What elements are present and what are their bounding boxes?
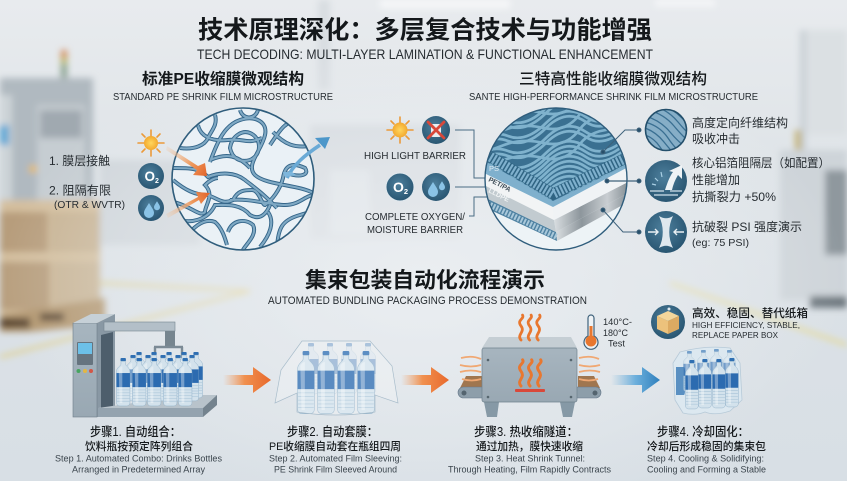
caption: step 2: PE收缩膜自动套在瓶组四周: [269, 439, 401, 453]
icon: thermometer: [584, 315, 598, 349]
subheading: process: AUTOMATED BUNDLING PACKAGING PROCESS DEMONSTRATION: [268, 295, 587, 307]
icon: oxygen: [138, 163, 164, 189]
caption: step 1: 饮料瓶按预定阵列组合: [85, 439, 193, 453]
caption: step 3: 步骤3. 热收缩隧道：: [474, 424, 578, 439]
caption: step 4: [647, 424, 766, 474]
caption: step 2: [269, 424, 402, 474]
chart: tangled polymer circle: [172, 108, 315, 250]
icon: cardboard box: [651, 305, 685, 339]
icon: oxygen: O: [144, 169, 155, 184]
layer labels: PS: [489, 164, 499, 173]
caption: step 4: Cooling and Forming a Stable: [647, 464, 766, 474]
layer labels: LLDPE: [487, 188, 511, 204]
heading: standard PE: 标准PE收缩膜微观结构: [142, 69, 304, 88]
caption: step 3: 通过加热，膜快速收缩: [476, 439, 583, 453]
text: burst PSI: [692, 219, 802, 249]
text: temperature: Test: [608, 338, 625, 350]
subtitle: TECH DECODING: MULTI-LAYER LAMINATION & FUNCTIONAL ENHANCEMENT: [197, 46, 653, 62]
text: aluminium foil barrier: 性能增加: [692, 173, 740, 187]
caption: step 2: PE Shrink Film Sleeved Around: [274, 464, 397, 474]
text: benefits: REPLACE PAPER BOX: [692, 330, 778, 340]
label: high light barrier: HIGH LIGHT BARRIER: [364, 150, 466, 162]
caption: step 4: Step 4. Cooling & Solidifying:: [647, 454, 764, 464]
label: oxygen and moisture barrier: [365, 211, 465, 236]
text: limits list: (OTR & WVTR): [54, 199, 125, 211]
title: 技术原理深化：多层复合技术与功能增强: [198, 16, 652, 44]
layer labels: PET/PA: [487, 177, 512, 194]
caption: step 4: 冷却后形成稳固的集束包: [647, 439, 766, 453]
caption: step 1: Arranged in Predetermined Array: [72, 464, 205, 474]
text: benefits: [692, 306, 808, 340]
panel: standard PE film: [49, 69, 333, 250]
text: oriented fibers: 高度定向纤维结构: [692, 115, 788, 130]
arrow: step 3 to 4: [611, 367, 660, 393]
caption: step 2: Step 2. Automated Film Sleeving:: [269, 454, 402, 464]
label: oxygen and moisture barrier: MOISTURE BARRIER: [367, 224, 463, 236]
icon: oxygen: [386, 173, 414, 201]
text: oriented fibers: [692, 115, 788, 146]
caption: step 4: 步骤4. 冷却固化：: [657, 424, 749, 439]
text: aluminium foil barrier: 核心铝箔阻隔层（如配置）: [692, 155, 830, 170]
heading: process: 集束包装自动化流程演示: [305, 268, 545, 292]
caption: step 2: 步骤2. 自动套膜：: [287, 424, 378, 439]
caption: step 1: [55, 424, 222, 474]
subheading: standard PE: STANDARD PE SHRINK FILM MICROSTRUCTURE: [113, 92, 333, 103]
icon: oxygen: O: [393, 179, 404, 195]
icon: sun: [138, 130, 164, 156]
caption: step 3: Step 3. Heat Shrink Tunnel:: [475, 454, 585, 464]
text: benefits: HIGH EFFICIENCY, STABLE,: [692, 320, 800, 330]
text: burst PSI: (eg: 75 PSI): [692, 237, 749, 249]
chart: layered film circle: [484, 107, 628, 251]
illustration: step 3 heat shrink tunnel: [458, 315, 601, 417]
label: oxygen and moisture barrier: COMPLETE OXYGEN/: [365, 211, 465, 223]
text: limits list: [49, 153, 125, 211]
illustration: step 2 film sleeving: [275, 341, 398, 415]
icon: oxygen: 2: [155, 178, 159, 185]
text: oriented fibers: 吸收冲击: [692, 131, 740, 146]
icon: oxygen: 2: [404, 187, 408, 196]
icon: burst PSI: [645, 211, 687, 253]
arrow: oxygen and moisture entering: [166, 192, 210, 218]
heading: Sante film: 三特高性能收缩膜微观结构: [519, 70, 707, 88]
caption: step 3: [448, 424, 611, 474]
caption: step 3: Through Heating, Film Rapidly Contracts: [448, 464, 611, 474]
icon: blocked light: [422, 116, 450, 144]
icon: tear strength: [645, 160, 687, 202]
text: benefits: 高效、稳固、替代纸箱: [692, 306, 808, 320]
icon: sun: [387, 117, 413, 143]
arrow: gas escaping: [283, 137, 330, 178]
text: temperature: 180°C: [603, 328, 628, 339]
text: burst PSI: 抗破裂 PSI 强度演示: [692, 219, 802, 234]
illustration: step 4 finished bundle: [673, 347, 742, 414]
panel: Sante high-performance film: [364, 70, 822, 253]
text: temperature: [603, 317, 632, 350]
arrow: step 1 to 2: [223, 367, 271, 393]
arrow: step 2 to 3: [401, 367, 449, 393]
connector lines: barriers: [455, 130, 487, 216]
text: limits list: 2. 阻隔有限: [49, 184, 111, 198]
text: temperature: 140°C-: [603, 317, 632, 328]
layer labels: [487, 164, 512, 204]
icon: water drop: [422, 173, 450, 201]
illustration: step 1 combining machine: [73, 314, 217, 417]
icon: water drop: [138, 195, 164, 221]
connector lines: features: [601, 128, 641, 234]
icon: oriented fibers: [644, 108, 688, 152]
subheading: Sante film: SANTE HIGH-PERFORMANCE SHRINK FILM MICROSTRUCTURE: [469, 92, 758, 103]
text: limits list: 1. 膜层接触: [49, 153, 110, 168]
arrow: light entering: [166, 146, 207, 176]
text: aluminium foil barrier: 抗撕裂力 +50%: [692, 189, 776, 204]
text: aluminium foil barrier: [692, 155, 830, 204]
caption: step 1: 步骤1. 自动组合：: [90, 424, 181, 439]
caption: step 1: Step 1. Automated Combo: Drinks Bottles: [55, 454, 222, 464]
